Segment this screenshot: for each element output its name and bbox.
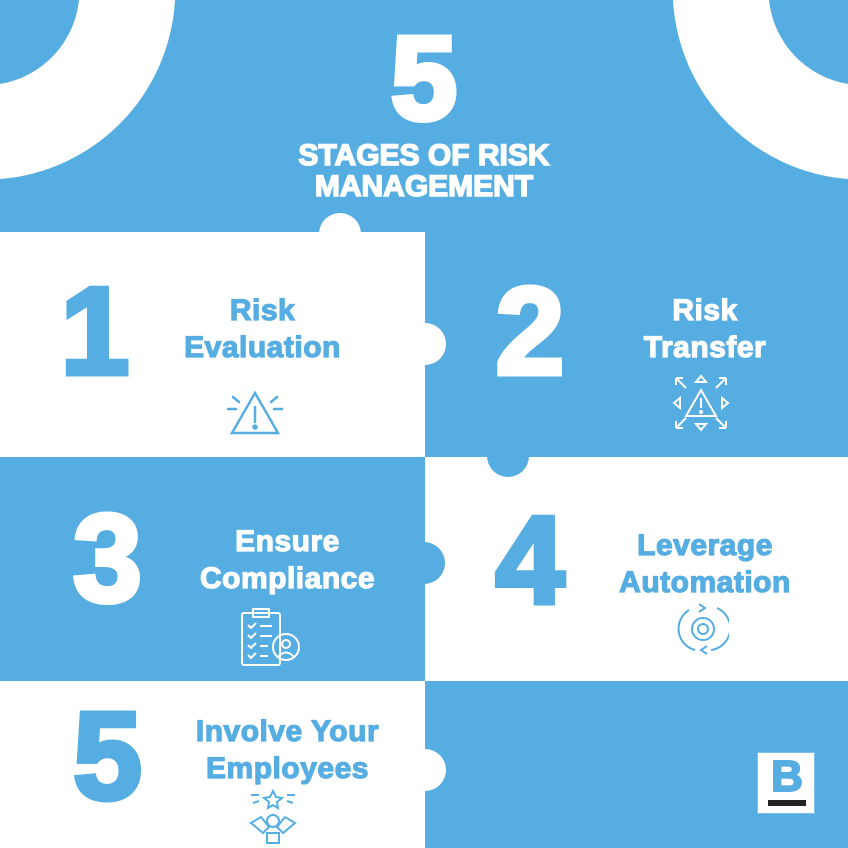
- heading 3: Compliance: [200, 562, 375, 595]
- number 1: 1: [61, 263, 129, 401]
- icon: compliance clipboard: [241, 608, 300, 666]
- heading 3: Ensure: [235, 525, 340, 558]
- number 2: 2: [496, 263, 564, 401]
- puzzle piece 1: [0, 213, 446, 457]
- icon: warning: [226, 390, 284, 434]
- heading 1: Risk: [230, 294, 295, 327]
- title text: [298, 139, 551, 203]
- heading 2: [643, 294, 766, 364]
- title number: 5: [391, 13, 457, 145]
- icon: risk transfer: [672, 374, 730, 432]
- heading 4: Leverage: [637, 529, 773, 562]
- decorative ring: top-left: [0, 0, 175, 179]
- heading 2: Transfer: [644, 331, 766, 364]
- icon: employees: [249, 789, 297, 844]
- heading 1: [184, 294, 341, 364]
- heading 5: Involve Your: [196, 715, 379, 748]
- heading 5: Employees: [206, 752, 369, 785]
- stage 4: [494, 492, 791, 655]
- puzzle piece 4: [403, 435, 848, 681]
- puzzle piece 5: [0, 681, 446, 848]
- stage 1: [61, 263, 341, 434]
- icon: automation gear: [678, 603, 729, 655]
- heading 1: Evaluation: [184, 331, 341, 364]
- heading 5: [196, 715, 379, 785]
- number 5: 5: [73, 688, 142, 826]
- heading 3: [200, 525, 375, 595]
- stage 2: [496, 263, 766, 432]
- heading 4: Automation: [619, 566, 791, 599]
- decorative ring: top-right: [673, 0, 848, 179]
- logo: [757, 752, 815, 814]
- number 4: 4: [496, 492, 564, 630]
- stage 3: [73, 490, 375, 666]
- heading 2: Risk: [672, 294, 738, 327]
- heading 4: [619, 529, 791, 599]
- stage 5: [73, 688, 379, 844]
- title text: MANAGEMENT: [315, 170, 533, 203]
- logo: B: [771, 752, 803, 801]
- title text: STAGES OF RISK: [298, 139, 550, 172]
- number 3: 3: [73, 490, 142, 628]
